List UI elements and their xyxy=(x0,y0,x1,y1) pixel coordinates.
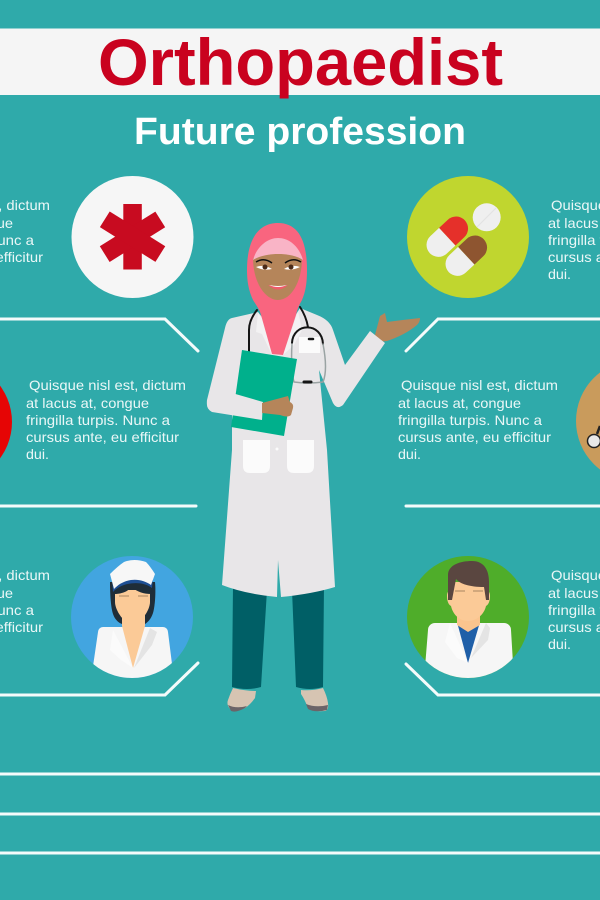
title banner: Orthopaedist xyxy=(98,25,503,99)
icon: nurse xyxy=(71,556,193,680)
facial features xyxy=(256,260,301,290)
text block: middle right: cursus ante, eu efficitur xyxy=(398,429,551,445)
pockets xyxy=(243,337,320,473)
text block: top right: dui. xyxy=(548,266,571,282)
figure: orthopaedist woman xyxy=(207,223,420,712)
text block: bottom left xyxy=(0,567,50,635)
title banner xyxy=(0,25,600,99)
text block: middle left: fringilla turpis. Nunc a xyxy=(26,412,170,428)
white coat xyxy=(207,308,385,597)
under-scarf xyxy=(253,238,303,260)
icon: medical asterisk xyxy=(72,176,194,298)
hijab xyxy=(247,223,307,355)
stethoscope xyxy=(249,307,326,383)
left hand xyxy=(262,396,293,416)
icon: red circle xyxy=(0,361,12,483)
text block: top left xyxy=(0,197,50,265)
text block: middle left: dui. xyxy=(26,446,49,462)
bottom lines xyxy=(0,774,600,853)
subtitle: Future profession xyxy=(134,111,466,153)
collar xyxy=(256,311,302,355)
icon: male doctor xyxy=(407,556,529,680)
text block: bottom right: dui. xyxy=(548,636,571,652)
text block: middle left: cursus ante, eu efficitur xyxy=(26,429,179,445)
connector lines xyxy=(0,319,600,695)
text block: middle right xyxy=(398,377,558,462)
text block: middle right: Quisque nisl est, dictum xyxy=(401,377,558,393)
shoes xyxy=(227,688,328,712)
trousers xyxy=(232,585,324,689)
left sleeve xyxy=(207,385,263,420)
text block: middle right: fringilla turpis. Nunc a xyxy=(398,412,542,428)
text block: middle right: at lacus at, congue xyxy=(398,395,521,411)
text block: middle left: at lacus at, congue xyxy=(26,395,149,411)
text block: middle right: dui. xyxy=(398,446,421,462)
text block: middle left: Quisque nisl est, dictum xyxy=(29,377,186,393)
text block: top right xyxy=(548,197,600,282)
right hand xyxy=(375,313,420,341)
face xyxy=(253,252,302,300)
text block: bottom right xyxy=(548,567,600,652)
icon: pills xyxy=(407,176,529,298)
clipboard xyxy=(231,350,297,436)
icon: tan circle with stethoscope xyxy=(576,360,600,482)
text block: middle left xyxy=(26,377,186,462)
